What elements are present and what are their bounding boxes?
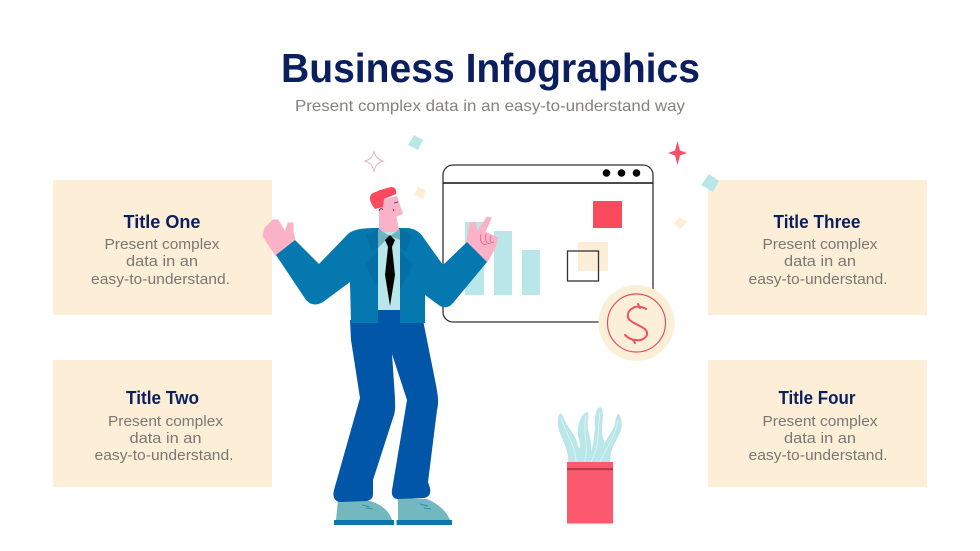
panel: title four: Present complex bbox=[762, 413, 878, 430]
icon: teal diamond left bbox=[408, 135, 423, 150]
belt area bbox=[378, 310, 400, 323]
panel: title one bbox=[53, 180, 272, 315]
panel: title two: Present complex bbox=[108, 413, 224, 430]
panel: title three: Present complex bbox=[762, 236, 878, 253]
left hand bbox=[263, 220, 295, 256]
title: Business Infographics bbox=[281, 45, 700, 91]
plant in pot bbox=[558, 407, 622, 524]
panel: title two bbox=[53, 360, 272, 487]
shirt bbox=[378, 232, 400, 310]
panel: title three: data in an bbox=[784, 253, 856, 270]
icon: beige diamond right bbox=[674, 217, 687, 229]
subtitle: Present complex data in an easy-to-understand way bbox=[295, 98, 685, 115]
browser window chart bbox=[443, 165, 653, 322]
panel: title four: easy-to-understand. bbox=[748, 447, 888, 464]
right hand bbox=[467, 217, 498, 262]
lapels bbox=[365, 229, 413, 290]
collar bbox=[378, 229, 400, 248]
panel: title one: data in an bbox=[126, 253, 198, 270]
jacket bbox=[276, 228, 487, 323]
icon: teal diamond right bbox=[701, 174, 719, 192]
panel: title three bbox=[708, 180, 927, 315]
panel: title three: Title Three bbox=[774, 211, 860, 232]
shoes bbox=[334, 498, 452, 525]
trousers bbox=[333, 320, 438, 502]
panel: title three: easy-to-understand. bbox=[748, 271, 888, 288]
hair bbox=[370, 187, 396, 209]
panel: title two: Title Two bbox=[126, 387, 199, 408]
icon: outline sparkle bbox=[365, 151, 383, 172]
neck and head bbox=[379, 208, 399, 238]
panel: title one: easy-to-understand. bbox=[91, 271, 230, 288]
panel: title one: Title One bbox=[124, 211, 200, 232]
icon: beige diamond left bbox=[414, 187, 426, 199]
tie bbox=[385, 235, 395, 306]
finger lines bbox=[480, 234, 494, 244]
icon: red sparkle bbox=[668, 141, 687, 165]
panel: title one: Present complex bbox=[104, 236, 220, 253]
panel: title four bbox=[708, 360, 927, 487]
panel: title four: data in an bbox=[784, 430, 856, 447]
panel: title two: easy-to-understand. bbox=[94, 447, 234, 464]
panel: title two: data in an bbox=[130, 430, 202, 447]
icon: dollar coin bbox=[598, 285, 674, 361]
face details bbox=[379, 202, 398, 211]
character: businessman bbox=[263, 187, 498, 525]
panel: title four: Title Four bbox=[778, 387, 856, 408]
